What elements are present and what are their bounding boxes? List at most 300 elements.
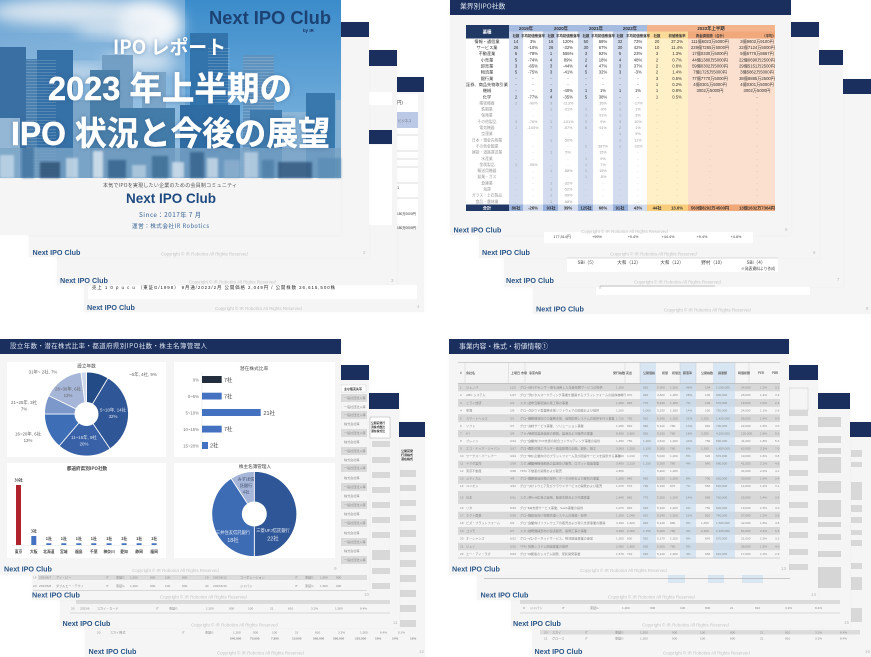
table: company details: 企業向けソフトウェアの販売および導入支援事業の展開 <box>528 520 605 525</box>
table rows: 2 <box>515 101 517 105</box>
panel: IPOs by prefecture bar chart: 1社 <box>76 536 82 542</box>
table: company details: 5,140 <box>657 552 665 556</box>
table header labels <box>483 25 725 36</box>
slide 6: 野村（10） <box>701 259 725 266</box>
table: company details: 1,200 <box>616 386 624 390</box>
table rows: 3 <box>585 51 588 56</box>
slide 5: industry table: +99% <box>592 235 603 239</box>
table: company details: 住宅関連部材の製造販売、設備工事の事業 <box>528 528 587 533</box>
table rows: - <box>656 120 658 124</box>
table: company details: 34,000 <box>741 386 751 390</box>
table rows: 海運 <box>483 186 491 192</box>
table rows: 30 <box>618 45 623 50</box>
table: company details: 1,070 <box>616 506 624 510</box>
table rows: 42% <box>634 45 642 50</box>
table rows: 73% <box>634 39 642 44</box>
table: company details: 780 <box>670 424 675 428</box>
table: company details: 日本 <box>466 494 472 500</box>
table rows: 30 <box>584 45 589 50</box>
table: company details: 8,450 <box>616 432 624 436</box>
table: company details: 飲食店向け情報管理システムの開発・提供 <box>528 512 587 518</box>
panel: IPOs by prefecture bar chart: 1社 <box>61 536 67 542</box>
table rows: 1 <box>550 181 552 185</box>
table: company details: 1,200 <box>616 408 624 412</box>
table rows: 37% <box>634 64 642 68</box>
table: company details: 5,200 <box>657 496 665 500</box>
table rows: -41% <box>563 70 573 75</box>
table: company details: 4% <box>686 552 691 556</box>
table rows: - <box>756 94 758 99</box>
slide 4 behind cover: 円) <box>397 100 403 106</box>
table rows: 11.4% <box>671 45 683 50</box>
table: company details: 1,820 <box>627 521 635 525</box>
table: company details: 1,350 <box>616 536 624 540</box>
slide 6: Copyright © IR Robotics All Rights Reserved <box>610 252 697 256</box>
table: company details: 4.8 <box>775 521 780 525</box>
table: company details: 910 <box>643 514 648 518</box>
table: company details: 920 <box>643 506 648 510</box>
table rows: - <box>585 200 587 204</box>
slide 6: Next IPO Club <box>482 248 531 257</box>
table: company details: 770 <box>643 496 648 500</box>
table: company details: 920 <box>643 536 648 540</box>
table rows: - <box>567 175 569 179</box>
table: company details: クラウド型業務支援ソフトウェアの開発および提供 <box>528 408 599 412</box>
table rows: -57% <box>564 126 573 130</box>
slide 12: 1,500 <box>360 630 368 634</box>
table rows: 機械 <box>483 87 492 94</box>
table header labels: 2023年上半期 <box>697 25 725 32</box>
table rows: - <box>709 114 711 118</box>
table: company details: 1,100 <box>701 446 709 450</box>
table: company details: 750 <box>627 439 632 443</box>
table: company details: 騰落率 <box>683 370 692 375</box>
table rows: - <box>656 101 658 105</box>
table: company details: PBR <box>772 371 778 375</box>
slide 10: アイ・ピー <box>56 574 71 580</box>
table rows: 43% <box>634 206 642 210</box>
table rows: サービス業 <box>477 44 498 51</box>
slide 10: 900 <box>150 576 155 580</box>
slide 4 behind cover: Next IPO Club <box>87 303 136 312</box>
table rows: 23% <box>634 51 642 56</box>
table: company details: 920 <box>643 393 648 397</box>
slide 10: 一般社団法人等 <box>344 520 366 525</box>
slide 12: 560,000 <box>313 636 324 640</box>
table: company details: 1,060 <box>643 408 651 412</box>
table rows: 倉庫業 <box>481 180 493 185</box>
table rows: 2 <box>585 120 587 124</box>
table: company details: 21 <box>460 544 464 548</box>
table: company details: グロース <box>520 438 532 443</box>
table rows: 0.7% <box>672 57 682 62</box>
table: company details: 3/17 <box>510 446 516 450</box>
table rows: 1 <box>585 169 587 173</box>
slide 16: 3.2% <box>815 636 822 640</box>
slide 15 <box>511 393 850 628</box>
table rows: -10% <box>634 144 643 148</box>
slide 10: 一般社団法人等 <box>344 557 366 562</box>
table header labels: 業種 <box>483 28 492 36</box>
table rows: 50 <box>584 39 589 44</box>
table: company details: ABC システム <box>466 392 486 397</box>
panel: IPOs by prefecture bar chart: 千葉 <box>90 549 98 555</box>
table: company details: グロース <box>520 423 532 428</box>
table: company details: 960 <box>627 496 632 500</box>
table: company details: グロース <box>520 505 532 510</box>
table rows: 化学 <box>483 93 491 100</box>
table: company details: オーシャンズ <box>466 536 484 540</box>
slide 16: 21 <box>760 630 764 634</box>
table rows: - <box>515 188 517 192</box>
table: company details: 570,000 <box>716 454 727 458</box>
table: company details: 780 <box>670 446 675 450</box>
table rows: 3 <box>619 70 622 75</box>
table rows: 水産業 <box>481 156 493 161</box>
table rows: - <box>709 151 711 155</box>
table: company details: 中小企業向けのプラットフォーム及び関連サービスを提供する事業 <box>528 453 621 458</box>
table: company details: 1,200 <box>670 506 678 510</box>
footer: Next IPO Club <box>454 226 502 234</box>
table rows: - <box>515 82 517 87</box>
table rows: その他金融業 <box>476 143 499 148</box>
table rows: 93社 <box>547 204 556 212</box>
table rows: -44% <box>563 64 573 68</box>
slide 10: 一般社団法人等 <box>344 430 366 435</box>
table rows: - <box>515 144 517 148</box>
slide 3 behind cover <box>57 50 397 285</box>
table: company details: 19 <box>460 529 464 533</box>
table rows: - <box>676 175 678 179</box>
table rows: 89% <box>564 57 572 62</box>
table rows: 22億0690万2500円 <box>739 56 775 63</box>
table rows: 1 <box>585 88 588 93</box>
slide 12: 公開前発 <box>401 448 413 453</box>
table rows: - <box>619 157 621 161</box>
table rows: - <box>656 144 658 148</box>
table rows: - <box>676 151 678 155</box>
table: company details: 1,010 <box>627 454 635 458</box>
slide 12: 5.1% <box>398 630 405 634</box>
table rows: - <box>602 194 604 198</box>
slide 16: 900 <box>672 630 677 634</box>
slide 16: 810 <box>785 636 790 640</box>
table rows: - <box>515 76 517 81</box>
panel: years since founding pie: 20% <box>80 442 88 446</box>
table: company details: グロース <box>520 536 532 540</box>
table rows: - <box>709 188 711 192</box>
slide 6: 大和（12） <box>660 259 684 266</box>
table: company details: 780 <box>670 544 675 548</box>
slide 10: 株式会社等 <box>344 511 359 516</box>
table: company details: 28,000 <box>741 393 751 397</box>
table: company details: スマートヘルス <box>466 416 488 420</box>
slide 10: 800 <box>182 584 187 588</box>
table rows: - <box>532 157 534 161</box>
table: company details: 770 <box>643 401 648 405</box>
table rows: 38億8885万2500円 <box>739 75 775 82</box>
table rows: 6 <box>585 126 587 130</box>
table: company details: 3.6 <box>775 496 780 500</box>
slide 10: 1,200 <box>130 576 138 580</box>
slide 10: 株式会社等 <box>344 439 359 444</box>
table: company details: 3.8 <box>775 454 780 458</box>
table rows: 59億0302万5000円 <box>692 62 728 70</box>
table: company details: 42,000 <box>741 521 751 525</box>
table: company details: 事業内容 <box>529 370 541 375</box>
table: company details: 2,850 <box>616 469 624 473</box>
table rows: -9% <box>600 108 607 112</box>
table rows: 5 <box>585 70 588 75</box>
slide 2 behind cover: 2 <box>363 250 366 255</box>
table rows: 3 <box>619 64 622 68</box>
table rows: 情報・通信業 <box>474 38 500 45</box>
table rows: - <box>532 132 534 136</box>
table: company details: 2.4 <box>775 401 780 405</box>
table: company details: 1,180 <box>670 408 678 412</box>
table: company details: 5 <box>460 416 462 420</box>
table: company details: 5% <box>686 454 691 458</box>
table: company details: 30,000 <box>741 476 751 480</box>
table: company details: 660 <box>705 552 710 556</box>
table rows: 4億0301万5000円 <box>693 81 727 88</box>
table rows: 17億0330万5000円 <box>692 50 728 57</box>
footer: 13 <box>781 566 787 571</box>
table: company details: ジェイ <box>466 544 475 548</box>
table: company details: - <box>643 469 644 473</box>
table: company details: 5.5 <box>775 529 780 533</box>
slide 16: 8.4% <box>840 630 847 634</box>
table rows: - <box>532 169 534 173</box>
table rows: - <box>656 114 658 118</box>
slide 3 behind cover: Copyright © IR Robotics All Rights Reserved <box>189 280 276 284</box>
table: company details: 5/26 <box>510 514 516 518</box>
table: company details: デジタルマーケティング事業を展開するプラットフォームの提供を行う <box>528 392 627 397</box>
slide 14 <box>477 365 818 600</box>
table rows: - <box>585 76 587 81</box>
table rows: - <box>756 114 758 118</box>
table: company details: 700 <box>705 476 710 480</box>
table rows: - <box>585 181 587 185</box>
slide 16: 東証G <box>615 630 624 634</box>
table rows: - <box>709 144 711 148</box>
table: company details: 1.5% <box>760 424 767 428</box>
community description: 本気でIPOを実現したい企業のための会員制コミュニティ <box>103 182 237 189</box>
footer: Next IPO Club <box>452 564 501 574</box>
table: company details: 再生可能エネルギー発電設備の企画、設計、施工 <box>528 446 596 450</box>
table: company details: 1,640 <box>616 454 624 458</box>
slide 15: 15 <box>844 620 850 625</box>
table: company details: EC支援サービス事業、SaaS事業の提供 <box>528 505 583 510</box>
table rows: -35% <box>563 94 573 99</box>
table rows: 15% <box>599 169 607 173</box>
slide 15: 3.2% <box>785 606 792 610</box>
table: company details: 1,280 <box>670 393 678 397</box>
table rows: - <box>515 88 517 93</box>
table: company details: TPM <box>520 469 527 473</box>
table rows: 29億5151万2500円 <box>739 62 775 70</box>
table: company details: 6% <box>686 446 691 450</box>
table: company details: 640 <box>627 476 632 480</box>
table: company details: - <box>686 469 687 473</box>
table rows: 2 <box>585 57 588 62</box>
table: company details: 1,640 <box>616 496 624 500</box>
table: company details: 5,110 <box>657 424 665 428</box>
table rows: - <box>676 120 678 124</box>
table: company details: 1,200 <box>643 439 651 443</box>
table rows: 68% <box>599 39 607 44</box>
table: company details: 3.0 <box>775 424 780 428</box>
table: company details: 5,150 <box>657 408 665 412</box>
slide 4 behind cover: ビジネス <box>398 118 412 123</box>
table rows: - <box>676 101 678 105</box>
slide 15: 800 <box>705 606 710 610</box>
table rows: - <box>602 82 604 87</box>
footer: Copyright © IR Robotics All Rights Reserved <box>132 568 219 573</box>
table rows: 1 <box>550 120 552 124</box>
table: company details: 2.1% <box>760 462 767 466</box>
table: company details: 5.3 <box>775 439 780 443</box>
table rows: 精密機器 <box>479 100 495 105</box>
table: company details: 900,000 <box>716 393 727 397</box>
slide 5: industry table: +9.4% <box>628 235 639 239</box>
table: company details: 1,250 <box>616 424 624 428</box>
table: company details: 1.5% <box>760 506 767 510</box>
table rows: - <box>756 151 758 155</box>
table rows: - <box>756 169 758 173</box>
table rows: - <box>637 82 639 87</box>
panel: shareholder registry donut: 三井住友信託銀行 <box>216 529 251 536</box>
stack: cover and slides 2-4 <box>0 0 424 312</box>
table rows: - <box>656 194 658 198</box>
table rows: - <box>756 157 758 161</box>
panel: IPOs by prefecture bar chart: 東京 <box>15 549 22 555</box>
table: IPOs by industry: 社数 <box>548 33 555 38</box>
table rows: 1 <box>550 51 553 56</box>
table rows: - <box>756 108 758 112</box>
table: company details: 720,000 <box>716 496 727 500</box>
table rows: 3% <box>635 114 641 118</box>
table rows: 2 <box>656 64 659 68</box>
table: IPOs by industry: 平均初値騰落率 <box>521 33 545 38</box>
table rows: 合計 <box>483 204 492 212</box>
table: company details: 2.0% <box>760 469 767 473</box>
table: company details: 1,150 <box>643 462 651 466</box>
table rows: 20 <box>655 39 660 44</box>
table rows: -32% <box>564 181 573 185</box>
table rows: 0.2% <box>672 82 682 87</box>
table: company details: 2.3% <box>760 446 767 450</box>
panel: dilutive shares bar chart: 15~20% <box>183 444 199 448</box>
cover photo: city skyline <box>0 0 341 178</box>
table: company details: 1.2% <box>760 484 767 488</box>
table: company details: 1,040 <box>627 514 635 518</box>
table: company details: グロース <box>520 512 532 518</box>
table rows: - <box>637 200 639 204</box>
table: company details: 3.4 <box>775 476 780 480</box>
panel: years since founding pie: 21~25年, 3社 <box>11 399 38 406</box>
panel: shareholder registry donut: 4社 <box>243 488 250 496</box>
table header labels: 2020年 <box>554 25 569 32</box>
panel: years since founding pie: 設立年数 <box>77 362 96 370</box>
table rows: 111億6023万5000円 <box>691 38 729 45</box>
table rows: - <box>602 181 604 185</box>
panel: years since founding pie: 31年~ 2社, 7% <box>29 368 57 376</box>
table: IPOs by industry: 平均初値騰落率 <box>591 33 615 38</box>
table rows: 91% <box>599 114 607 118</box>
table rows: - <box>550 76 552 81</box>
table: company details: 2.4% <box>760 529 767 533</box>
table: company details: 2,310 <box>627 462 635 466</box>
panel: IPOs by prefecture bar chart: 3社 <box>31 528 37 534</box>
panel: IPOs by prefecture bar chart: 福岡 <box>150 549 158 555</box>
table: company details: # <box>460 371 462 375</box>
slide 10: 100 <box>165 584 170 588</box>
table rows: - <box>756 188 758 192</box>
slide 15: Next IPO Club <box>513 619 562 628</box>
logo top right: Next IPO Club <box>209 8 331 28</box>
table rows: - <box>656 126 658 130</box>
table: company details: 54,000 <box>741 529 751 533</box>
table: company details: 10 <box>460 454 464 458</box>
slide 10: 40 <box>205 584 209 588</box>
logo top right: by IR <box>303 28 315 33</box>
panel: IPOs by prefecture bar chart: 宮城 <box>60 549 68 555</box>
table rows: -75% <box>528 70 538 75</box>
table: company details: 520,000 <box>716 484 727 488</box>
table: company details: 870 <box>670 484 675 488</box>
table rows: - <box>756 175 758 179</box>
table rows: - <box>637 169 639 173</box>
table: company details: 840 <box>705 424 710 428</box>
table rows: - <box>676 188 678 192</box>
table: company details: 3,560 <box>616 446 624 450</box>
table rows: - <box>637 181 639 185</box>
panel: dilutive shares bar chart: 0~5% <box>188 394 199 399</box>
table rows: - <box>515 151 517 155</box>
slide 10: 株式会社等 <box>344 530 359 535</box>
slide 11: 810 <box>288 606 293 610</box>
table: company details: 1.8% <box>760 521 767 525</box>
table rows: 1 <box>585 114 587 118</box>
panel: dilutive shares bar chart: 潜在株式比率 <box>240 365 269 372</box>
slide 6: 6 <box>813 250 816 255</box>
table rows: 86社 <box>512 204 521 212</box>
table: company details: 3% <box>686 529 691 533</box>
table: company details: エコ・テック・ジャパン <box>466 446 500 450</box>
table rows: - <box>756 163 758 167</box>
table: company details: KY <box>466 432 470 436</box>
table: company details: 14% <box>686 408 692 412</box>
table rows: 3002万5000円 <box>696 88 724 94</box>
table: company details: 160 <box>705 408 710 412</box>
table rows: - <box>637 188 639 192</box>
slide 10: 主な販売先等 <box>344 386 362 391</box>
table rows: - <box>709 132 711 136</box>
table: company details: 13 <box>460 476 464 480</box>
slide 15: 21 <box>730 606 734 610</box>
table: company details: 1,200 <box>616 393 624 397</box>
table rows: 4 <box>585 64 588 68</box>
table rows: 3 <box>550 64 553 68</box>
table rows: 2 <box>619 126 621 130</box>
table: company details: 25,000 <box>741 496 751 500</box>
slide 4 behind cover: Copyright © IR Robotics All Rights Reserved <box>215 306 302 311</box>
slide 12: Copyright © IR Robotics All Rights Reserved <box>217 650 304 656</box>
table header labels: 2019年 <box>519 25 534 32</box>
slide 12 <box>85 422 425 657</box>
table rows: - <box>637 163 639 167</box>
